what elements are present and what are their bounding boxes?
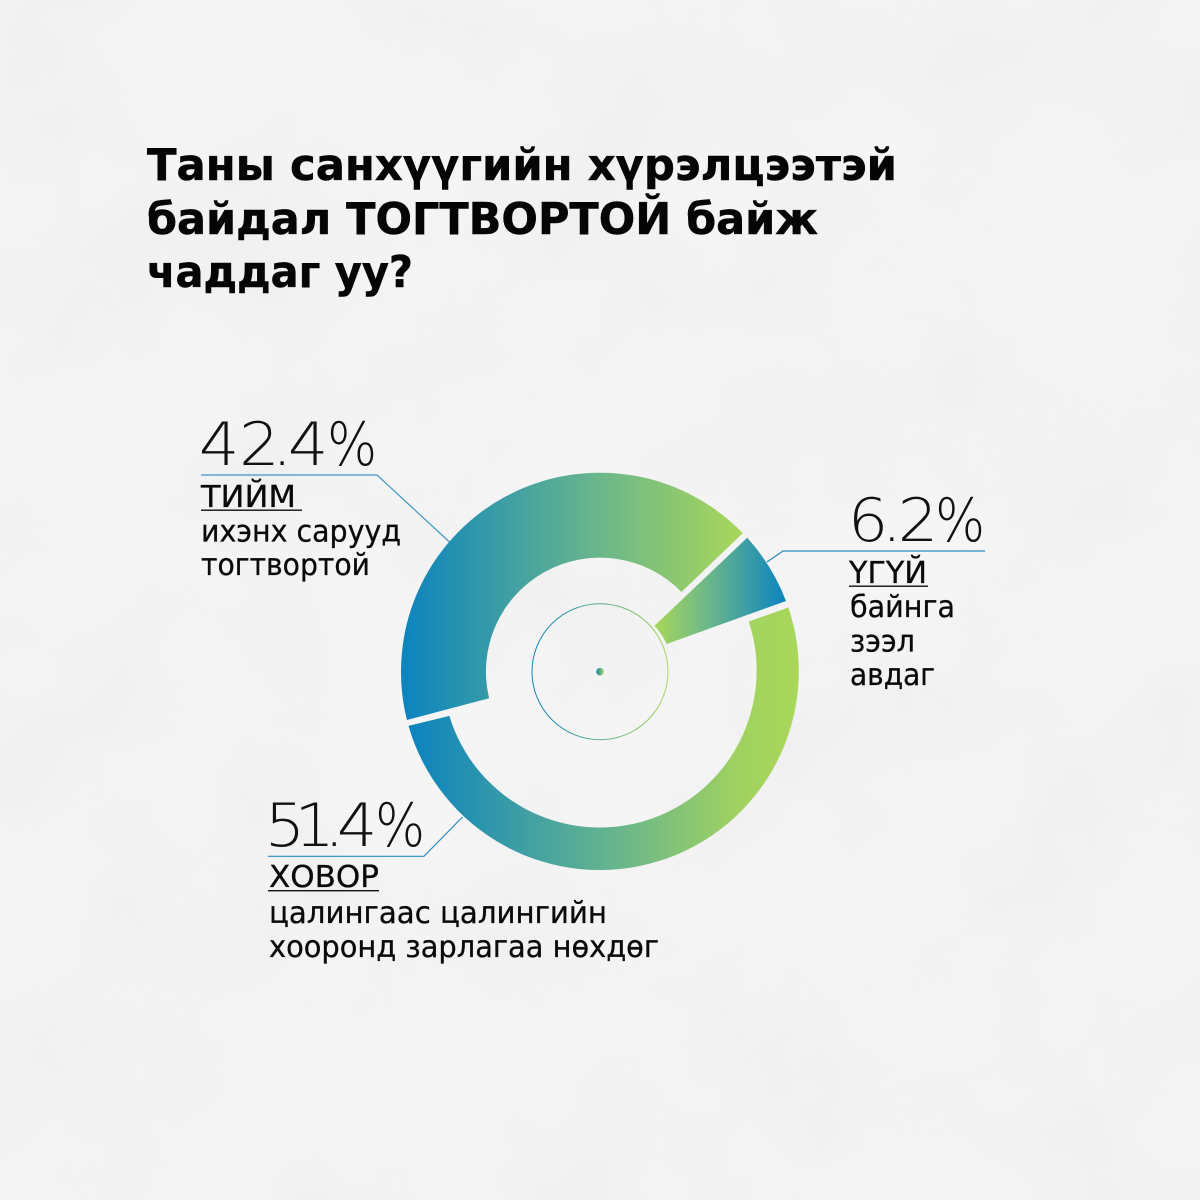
title bbox=[147, 140, 897, 298]
callout: ТИЙМ: % bbox=[327, 411, 377, 480]
leader line: ҮГҮЙ bbox=[767, 551, 985, 562]
leader line: ХОВОР bbox=[268, 817, 462, 856]
callout: ХОВОР bbox=[265, 791, 659, 965]
callout: ХОВОР: 51.4 bbox=[265, 791, 377, 861]
inner ring bbox=[532, 604, 668, 740]
segment: ТИЙМ 42.4% bbox=[401, 473, 743, 720]
callout: ҮГҮЙ: 6.2 bbox=[848, 486, 938, 556]
callout: ҮГҮЙ: байнга bbox=[850, 590, 955, 625]
center dot bbox=[596, 668, 604, 676]
callout: ТИЙМ: тогтвортой bbox=[201, 548, 370, 583]
callout: ҮГҮЙ: % bbox=[935, 487, 985, 556]
callout: ХОВОР: цалингаас цалингийн bbox=[269, 896, 607, 931]
leader line: ТИЙМ bbox=[201, 475, 450, 542]
donut chart bbox=[401, 473, 799, 870]
callout: ТИЙМ: 42.4 bbox=[199, 410, 328, 480]
title: чаддаг уу? bbox=[147, 247, 413, 298]
callout: ҮГҮЙ: ҮГҮЙ bbox=[848, 555, 927, 591]
segment: ҮГҮЙ 6.2% bbox=[654, 538, 786, 644]
callout: ҮГҮЙ: зээл bbox=[850, 624, 915, 660]
title: байдал ТОГТВОРТОЙ байж bbox=[147, 192, 818, 245]
callout: ТИЙМ bbox=[199, 410, 401, 583]
callout: ХОВОР: % bbox=[375, 792, 425, 861]
title: Таны санхүүгийн хүрэлцээтэй bbox=[147, 140, 897, 191]
callout: ТИЙМ: ТИЙМ bbox=[200, 479, 296, 515]
segment: ХОВОР 51.4% bbox=[408, 608, 799, 870]
callout: ҮГҮЙ bbox=[848, 486, 985, 693]
callout: ХОВОР: ХОВОР bbox=[269, 860, 379, 895]
callout: ХОВОР: хооронд зарлагаа нөхдөг bbox=[269, 930, 659, 965]
callout: ТИЙМ: ихэнх сарууд bbox=[201, 514, 401, 550]
callout: ҮГҮЙ: авдаг bbox=[850, 658, 935, 693]
